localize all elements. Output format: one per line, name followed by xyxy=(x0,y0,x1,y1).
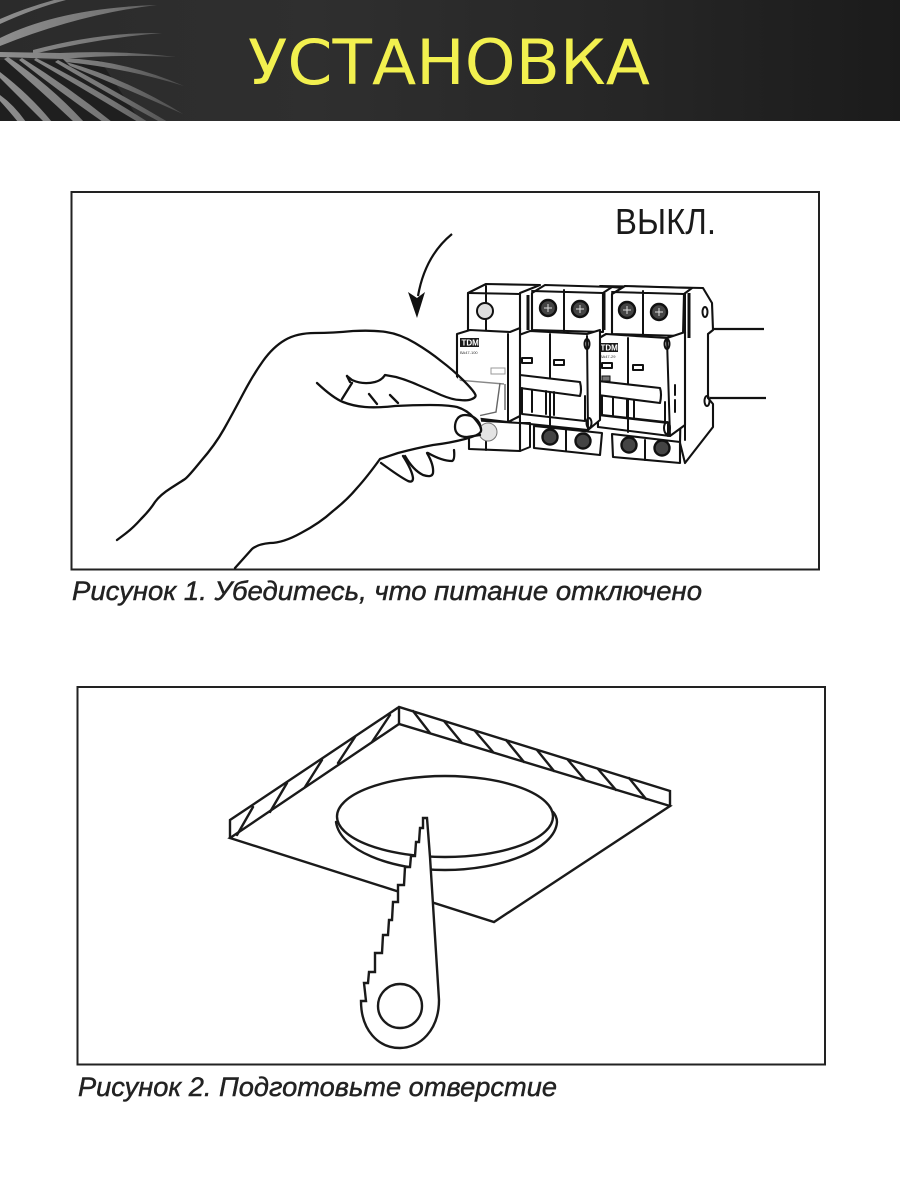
thumb outline xyxy=(235,383,481,568)
brand label: TDM xyxy=(462,338,479,348)
skin creases xyxy=(342,376,398,404)
circular hole xyxy=(336,776,557,870)
title: УСТАНОВКА xyxy=(248,26,650,99)
hand outline xyxy=(117,331,476,540)
circuit breaker 1 xyxy=(457,284,540,451)
caption 2: Рисунок 2. Подготовьте отверстие xyxy=(78,1072,557,1102)
thumbnail xyxy=(455,415,481,437)
brand label: TDM xyxy=(600,344,618,352)
header banner xyxy=(0,0,900,122)
arrow: downward curve xyxy=(408,234,452,318)
panel: power off xyxy=(72,192,819,570)
circuit breaker 2 xyxy=(516,285,612,455)
icon: saw blade xyxy=(361,818,439,1048)
screws xyxy=(619,302,667,320)
din rail housing xyxy=(600,286,713,463)
hatching xyxy=(237,711,646,835)
panel: cutting the hole xyxy=(78,687,825,1064)
circuit breaker 3 xyxy=(594,286,692,463)
ceiling board xyxy=(230,707,670,922)
label: off: ВЫКЛ. xyxy=(615,201,716,242)
wires xyxy=(710,329,766,398)
circuit breaker 3: ВА47-29 xyxy=(600,354,616,359)
palm leaf decoration xyxy=(0,0,184,122)
lower fingers xyxy=(381,450,454,482)
circuit breaker 1: ВА47-100 xyxy=(460,350,478,355)
caption 1: Рисунок 1. Убедитесь, что питание отключено xyxy=(72,576,702,606)
icon: hand xyxy=(117,330,482,568)
